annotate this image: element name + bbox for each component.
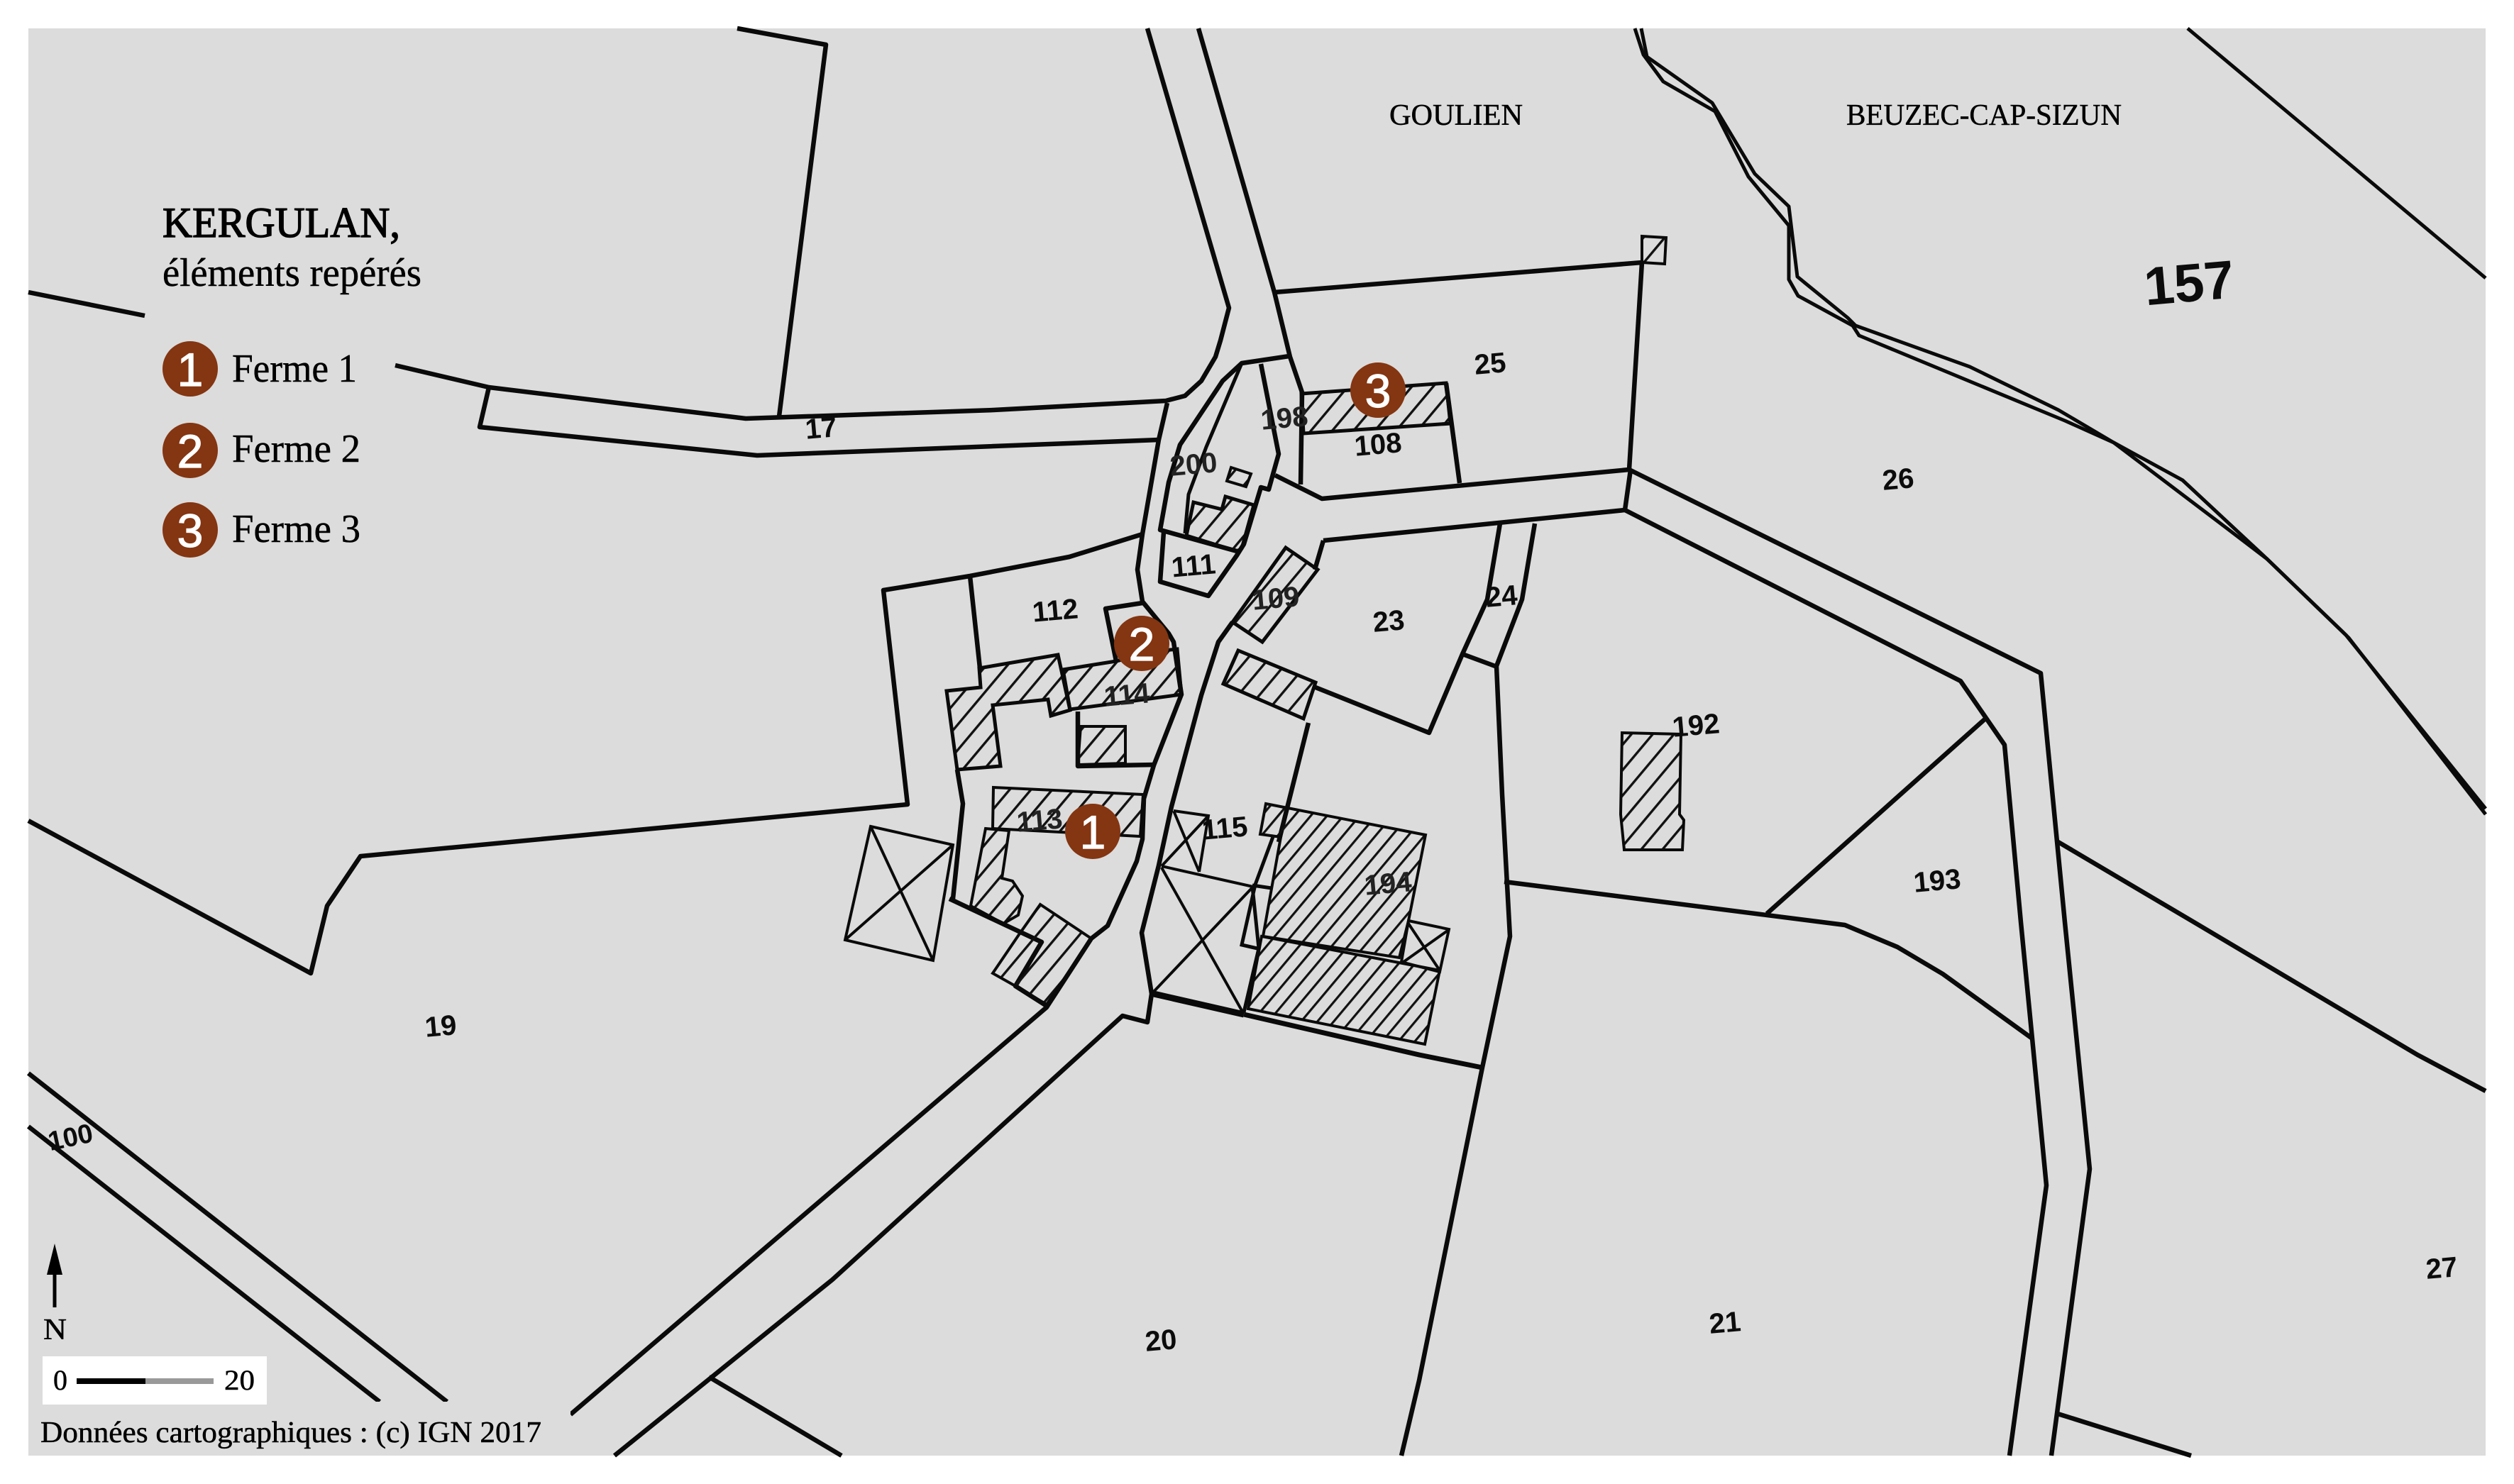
number 194: 194 — [1363, 866, 1413, 902]
number 20: 20 — [1144, 1324, 1178, 1358]
road 100 north side — [28, 1073, 447, 1402]
parcel 21 north edge — [1504, 882, 2032, 1039]
crossed square east of 194 — [1401, 921, 1449, 972]
building 194 south — [1248, 936, 1440, 1044]
large crossed square — [1152, 866, 1253, 1013]
north-east parcel line — [2188, 28, 2486, 278]
marker 3 on map: 3 — [1365, 365, 1391, 417]
number 114: 114 — [1103, 677, 1152, 713]
farm 2 outbuilding — [1078, 726, 1125, 765]
marker 3 on map — [1350, 362, 1406, 418]
small hatched hut — [1642, 236, 1666, 264]
hut in parcel 200 — [1227, 467, 1251, 487]
stub boundary far west — [28, 292, 145, 316]
marker 2 on map: 2 — [1129, 618, 1154, 670]
farm 1 south building — [993, 904, 1091, 1004]
number 25: 25 — [1473, 347, 1507, 381]
commune boundary line A — [1641, 28, 2486, 814]
number 111: 111 — [1170, 548, 1217, 584]
south-east parcel line — [2058, 1414, 2191, 1456]
legend — [162, 341, 360, 558]
central road east side — [1315, 541, 1323, 570]
east road south side — [1323, 510, 2046, 1456]
scale bar: 0 — [53, 1364, 67, 1396]
scale bar: 20 — [224, 1364, 255, 1396]
road 17 south side — [480, 387, 1159, 455]
parcel 23 — [1316, 654, 1495, 733]
parcel 198 east line — [1160, 364, 1279, 596]
number 21: 21 — [1708, 1306, 1742, 1340]
marker 2 on map — [1114, 616, 1169, 671]
credit band background — [28, 1402, 570, 1456]
east road north side — [1275, 470, 2090, 1456]
north-west parcel — [737, 28, 826, 416]
farm 2 main L-shaped building — [947, 655, 1070, 770]
crossed square 115 — [1162, 811, 1208, 872]
heavy wall — [1154, 994, 1244, 1014]
road 17 north side and north road west side — [395, 28, 1229, 419]
legend item: Ferme 3 — [162, 502, 360, 558]
legend item: Ferme 2: 2 — [177, 425, 203, 477]
legend item: Ferme 3: 3 — [177, 504, 203, 557]
number 23: 23 — [1372, 604, 1406, 638]
number 192: 192 — [1671, 708, 1721, 743]
number 113: 113 — [1015, 803, 1064, 838]
number 115: 115 — [1201, 811, 1249, 846]
central road east side south — [614, 622, 1233, 1456]
commune name: Beuzec-Cap-Sizun: BEUZEC-CAP-SIZUN — [1846, 99, 2122, 132]
sliver beside building 194 — [1242, 835, 1274, 1012]
parcel 194 south edge — [1244, 1014, 1482, 1068]
road 100 south side — [28, 1126, 380, 1402]
building in parcel 200 — [1186, 497, 1254, 551]
farm 2 building 114 — [1063, 649, 1181, 709]
marker 1 on map: 1 — [1080, 806, 1106, 858]
parcel 198 and 200 block — [1160, 356, 1289, 551]
north arrow: N — [43, 1314, 67, 1346]
farm 1 building 113 — [993, 787, 1143, 836]
parcel 200 inner line — [1185, 363, 1242, 533]
title: KERGULAN, — [162, 199, 400, 246]
east road cross line — [1625, 470, 1631, 510]
commune name: Goulien: GOULIEN — [1389, 99, 1523, 132]
number 157: 157 — [2141, 250, 2237, 317]
farm 1 south wall — [949, 899, 1047, 1006]
central road west side — [570, 403, 1181, 1414]
subtitle: éléments repérés — [162, 251, 421, 295]
number 24: 24 — [1484, 580, 1519, 614]
buildings — [947, 236, 1684, 1044]
farm 1 west wing — [971, 829, 1022, 924]
number 109: 109 — [1251, 581, 1301, 616]
legend item: Ferme 2: Ferme 2 — [232, 427, 360, 471]
legend item: Ferme 1: 1 — [177, 343, 203, 396]
building 194 north — [1260, 804, 1426, 958]
commune boundary line B — [1635, 28, 2486, 809]
legend item: Ferme 1 — [162, 341, 357, 397]
building 192 — [1621, 733, 1684, 850]
legend item: Ferme 3: Ferme 3 — [232, 507, 360, 551]
number 19: 19 — [424, 1009, 458, 1043]
parcel 25 — [1274, 262, 1642, 470]
number 198: 198 — [1259, 401, 1309, 436]
number 200: 200 — [1169, 447, 1218, 482]
eastern parcel line — [2057, 841, 2486, 1091]
number 26: 26 — [1881, 463, 1915, 497]
marker 1 on map — [1065, 804, 1120, 859]
parcel 20 south-west corner — [709, 1377, 842, 1456]
legend item: Ferme 1: Ferme 1 — [232, 347, 357, 391]
north road east side — [1198, 28, 1302, 484]
farm 3 building — [1301, 383, 1450, 433]
number 27: 27 — [2425, 1251, 2459, 1285]
number 17: 17 — [804, 411, 838, 445]
parcel 108 east line — [1446, 383, 1460, 483]
parcel 23 east edge — [1462, 524, 1500, 654]
number 112: 112 — [1031, 593, 1079, 629]
parcel 194 west edge — [1279, 723, 1308, 842]
crossed square west — [845, 826, 953, 960]
parcel 24 and 194 east edge — [1401, 524, 1535, 1456]
parcels 112 and 19 — [28, 534, 1142, 973]
parcel 114 notch — [1106, 603, 1142, 661]
north arrow — [43, 1244, 67, 1346]
crossed structures — [845, 811, 1449, 1013]
parcel 193 diagonal — [1767, 719, 1985, 914]
number 108: 108 — [1353, 427, 1403, 463]
number 100: 100 — [45, 1119, 96, 1157]
legend item: Ferme 2 — [162, 423, 360, 478]
data credit: Données cartographiques : (c) IGN 2017 — [40, 1417, 541, 1449]
number 193: 193 — [1912, 863, 1962, 899]
scale bar — [43, 1356, 267, 1405]
building 109 — [1233, 548, 1318, 642]
west side of farm yard — [953, 770, 963, 899]
parcel 112 divider — [970, 576, 980, 668]
building east of central road — [1223, 650, 1316, 719]
farm 2 yard — [1078, 711, 1155, 766]
parcel numbers — [45, 250, 2459, 1358]
